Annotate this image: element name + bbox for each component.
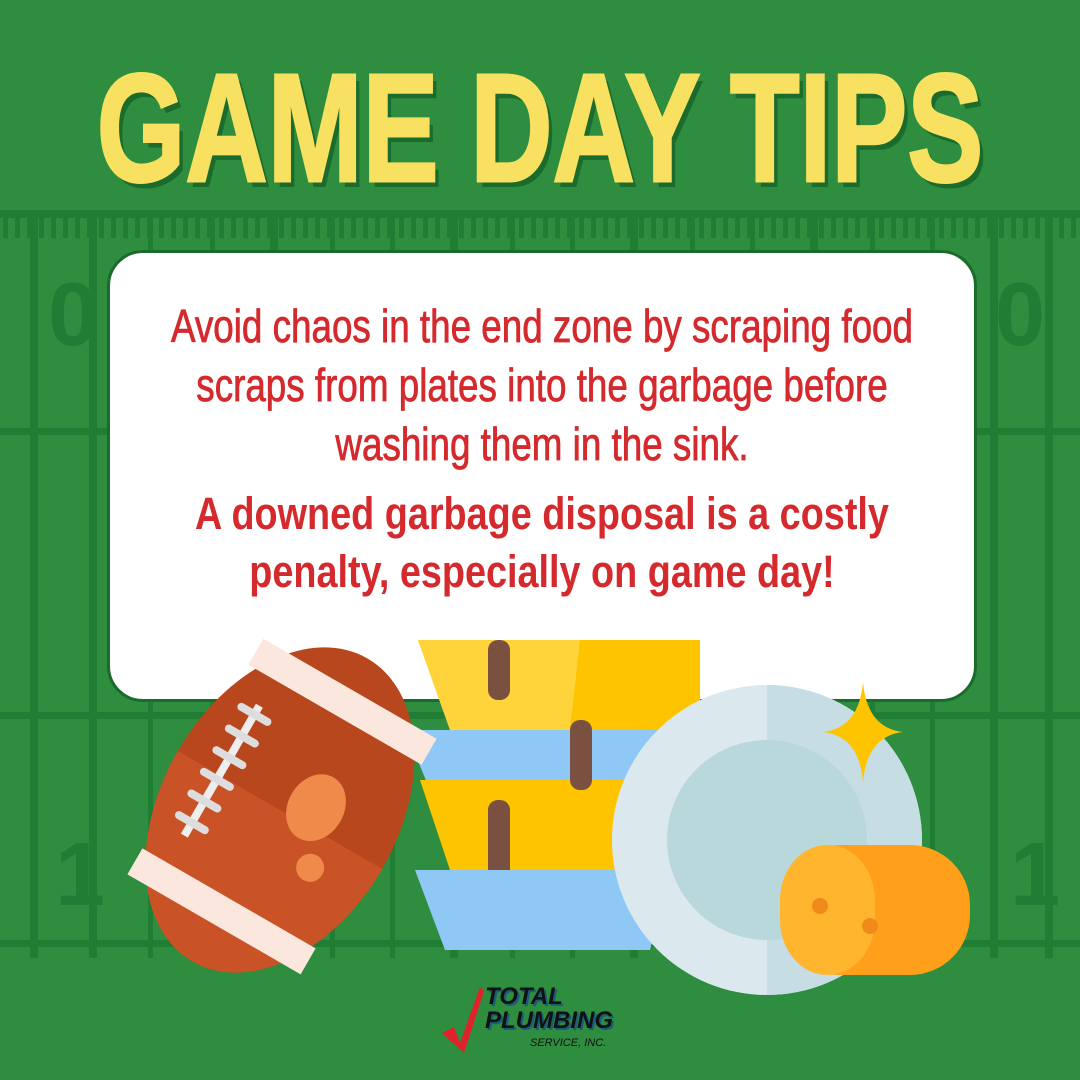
logo <box>442 983 614 1053</box>
text: warning: A downed garbage disposal is a costly <box>195 488 889 539</box>
illustration: football <box>127 639 436 974</box>
logo: SERVICE, INC. <box>530 1037 606 1049</box>
text: tip body <box>170 300 913 470</box>
text: tip body: washing them in the sink. <box>335 418 749 470</box>
field background: 0 <box>48 265 98 365</box>
logo text <box>485 983 614 1034</box>
illustration: plate <box>612 682 970 995</box>
title: GAME DAY TIPS <box>97 42 983 214</box>
text: warning: penalty, especially on game day! <box>249 546 835 597</box>
logo text: PLUMBING <box>485 1007 613 1034</box>
panel: tip card <box>107 250 977 702</box>
illustration: bowls <box>415 640 700 950</box>
field background: 1 <box>1010 825 1060 925</box>
logo text: TOTAL <box>485 983 563 1010</box>
text: warning <box>195 488 889 597</box>
field background: 1 <box>55 825 105 925</box>
icon: red check <box>442 987 484 1053</box>
text: tip body: scraps from plates into the garbage before <box>196 359 888 411</box>
text: tip body: Avoid chaos in the end zone by scraping food <box>171 300 913 352</box>
field background: 0 <box>995 265 1045 365</box>
